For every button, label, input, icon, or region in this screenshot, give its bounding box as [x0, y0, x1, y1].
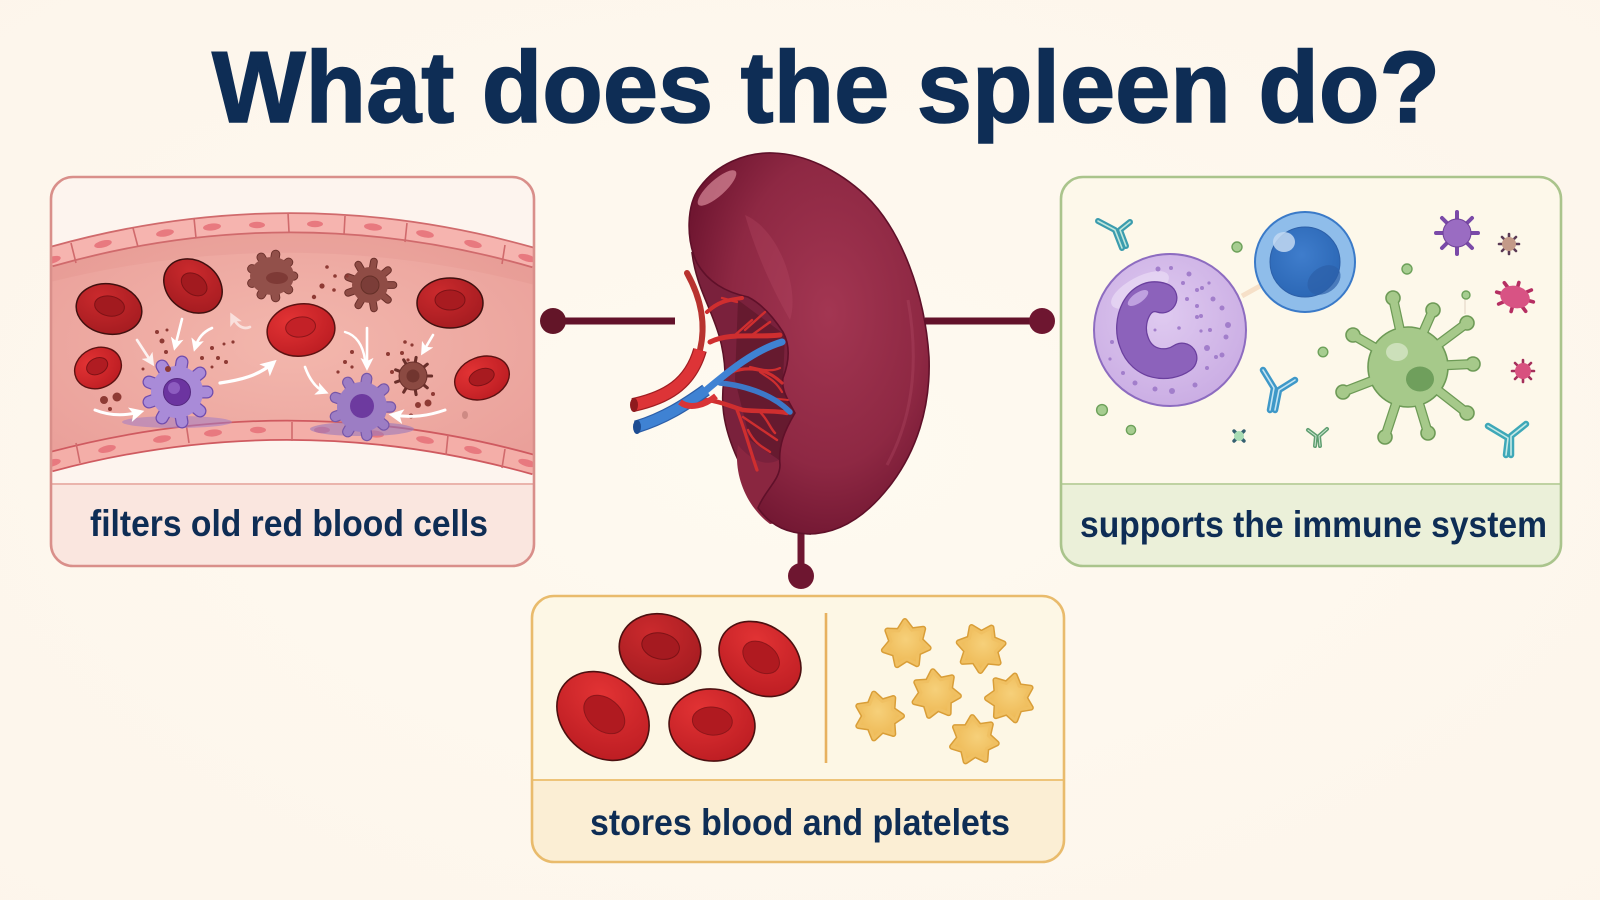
damaged cell G — [250, 254, 294, 298]
panel: stores blood and platelets — [532, 596, 1064, 863]
macrophage left — [122, 362, 232, 428]
label: filters: filters old red blood cells — [90, 503, 488, 544]
connector left — [540, 308, 675, 334]
title: What does the spleen do? — [212, 32, 1440, 144]
platelets — [858, 618, 1040, 771]
debris — [100, 265, 435, 418]
vessel illustration — [42, 213, 537, 469]
antibody centre — [1263, 370, 1295, 410]
panel: filters old red blood cells — [42, 177, 537, 567]
small particle — [1234, 431, 1244, 441]
neutrophil — [1094, 254, 1246, 406]
antibody lower right — [1488, 424, 1526, 455]
red blood cell A — [75, 282, 143, 336]
lymphocyte — [1255, 212, 1355, 312]
label: stores: stores blood and platelets — [590, 802, 1010, 843]
antibody top left — [1098, 221, 1130, 248]
highlight — [693, 165, 741, 211]
virus purple — [1436, 212, 1478, 254]
dendritic cell — [1336, 291, 1480, 444]
virus pink small — [1512, 360, 1534, 382]
red blood cell D — [417, 278, 483, 328]
hilum shadow — [735, 300, 795, 462]
red blood cell F — [454, 355, 510, 401]
divider — [825, 613, 827, 763]
label band bottom — [532, 779, 1064, 863]
damaged cell H — [348, 262, 393, 308]
spleen back lobe — [692, 253, 810, 534]
connector bottom — [788, 530, 814, 589]
green dots — [1097, 242, 1470, 435]
macrophage right — [310, 378, 414, 436]
antibody small green — [1308, 429, 1327, 446]
label: supports: supports the immune system — [1080, 504, 1547, 545]
connector right — [925, 308, 1055, 334]
damaged cell I — [396, 357, 432, 395]
label band right — [1061, 483, 1561, 567]
red blood cell C — [266, 303, 336, 357]
connector faint lines — [1242, 286, 1260, 296]
virus pink — [1493, 278, 1537, 316]
virus tan — [1499, 234, 1519, 254]
label band left — [51, 483, 534, 567]
red blood cells — [539, 606, 816, 779]
main lobe — [689, 153, 929, 534]
vein tree — [720, 383, 790, 412]
white arrows — [95, 316, 445, 416]
red blood cell E — [74, 346, 122, 390]
artery tree — [687, 273, 788, 470]
red blood cell B — [163, 258, 223, 314]
spleen illustration — [630, 153, 929, 534]
lower bump — [737, 445, 800, 524]
panel: supports the immune system — [1061, 177, 1561, 567]
